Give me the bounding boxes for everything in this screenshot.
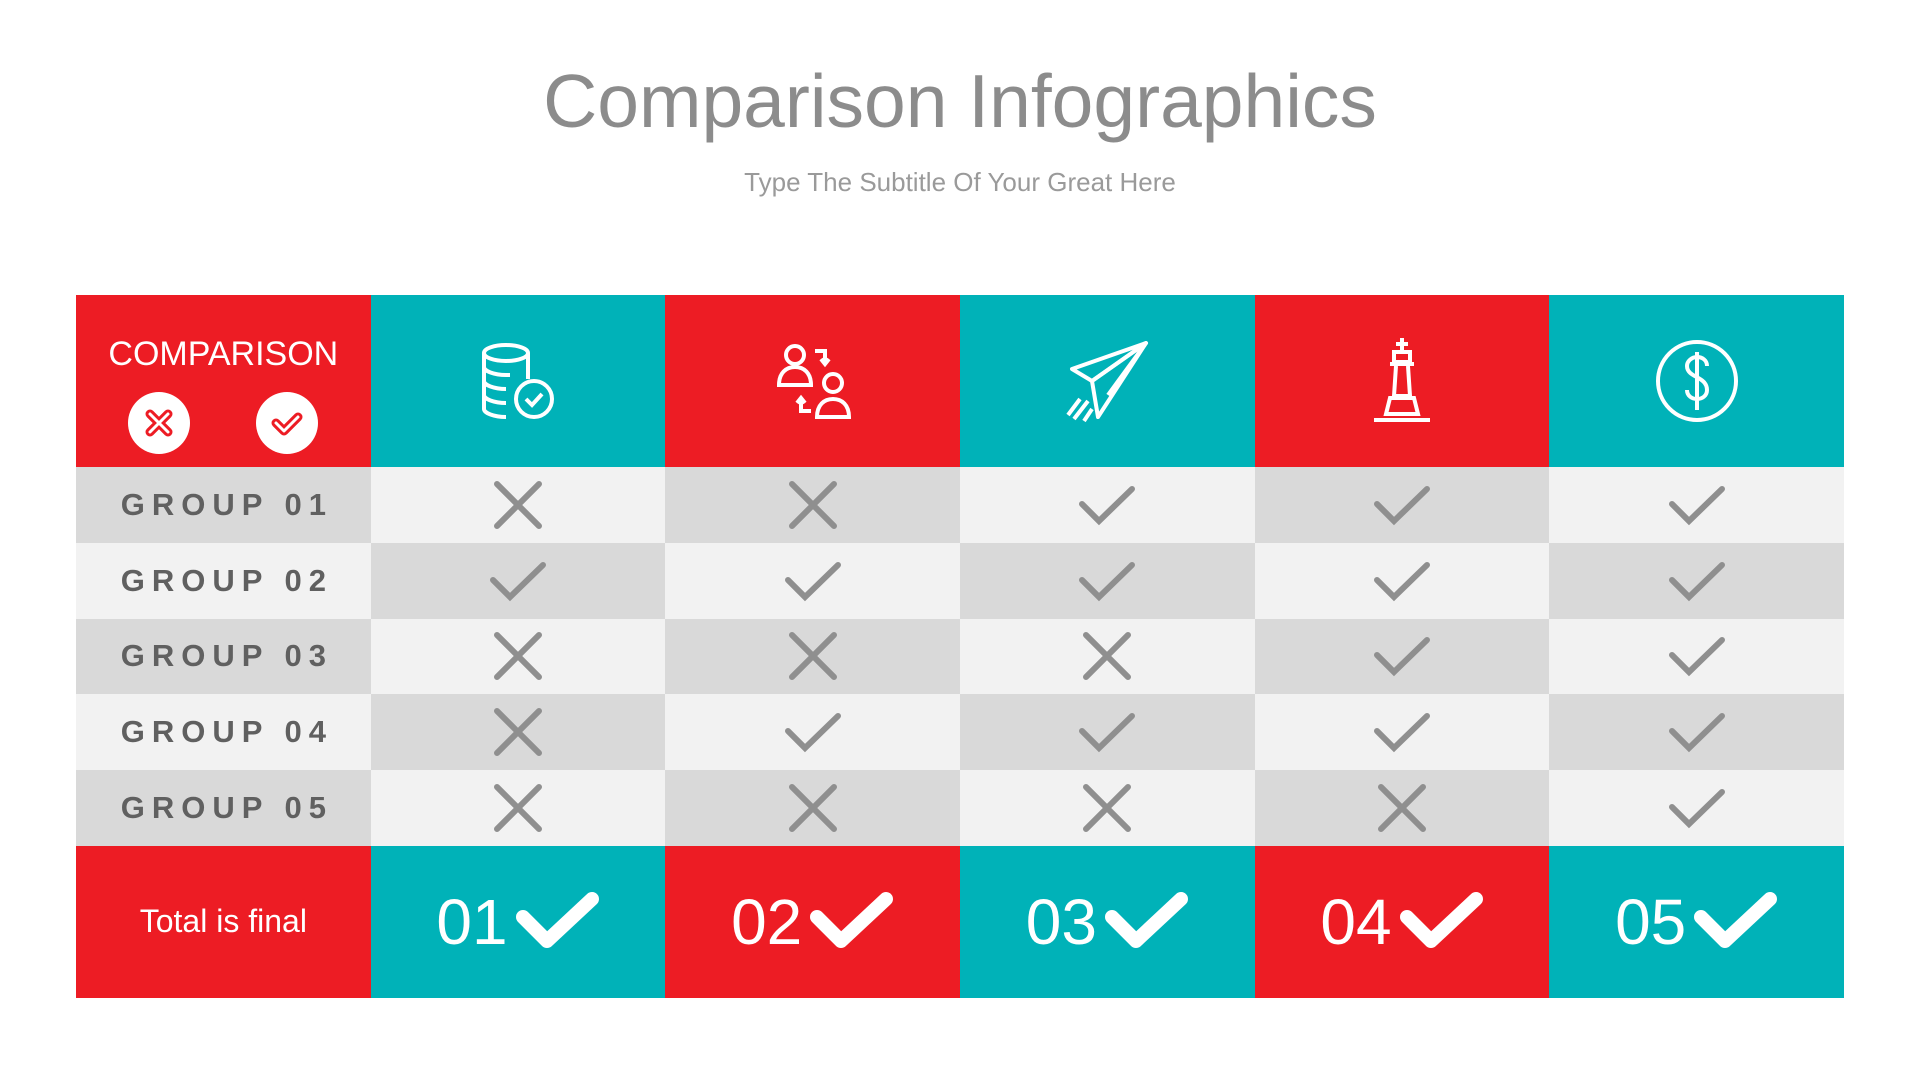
footer: 01: 01 (436, 886, 508, 958)
footer: 02 (665, 846, 960, 998)
row: group 02 (76, 543, 371, 619)
row: group 05: GROUP 05 (121, 790, 333, 825)
row: group 03 (76, 619, 371, 694)
footer: 04: 04 (1320, 886, 1392, 958)
footer: 03 (960, 846, 1255, 998)
row: group 02: GROUP 02 (121, 563, 333, 598)
comparison table (76, 295, 1844, 998)
row: group 01: GROUP 01 (121, 487, 333, 522)
header icon: chess king (1255, 295, 1549, 467)
footer: total label (76, 846, 371, 998)
footer: 04 (1255, 846, 1549, 998)
row: group 05 (76, 770, 371, 846)
footer: 05 (1549, 846, 1844, 998)
header icon: people exchange (665, 295, 960, 467)
footer: 05: 05 (1615, 886, 1686, 958)
subtitle: Type The Subtitle Of Your Great Here (744, 167, 1176, 197)
title: Comparison Infographics (543, 59, 1377, 143)
footer: total label: Total is final (140, 903, 307, 939)
row: group 01 (76, 467, 371, 543)
header: comparison label: COMPARISON (108, 334, 338, 372)
header icon: dollar coin (1549, 295, 1844, 467)
row: group 03: GROUP 03 (121, 638, 333, 673)
header: comparison label (76, 295, 371, 467)
row: group 04 (76, 694, 371, 770)
header icon: database (371, 295, 665, 467)
footer: 03: 03 (1026, 886, 1097, 958)
footer: 01 (371, 846, 665, 998)
header icon: paper plane (960, 295, 1255, 467)
row: group 04: GROUP 04 (121, 714, 333, 749)
footer: 02: 02 (731, 886, 802, 958)
